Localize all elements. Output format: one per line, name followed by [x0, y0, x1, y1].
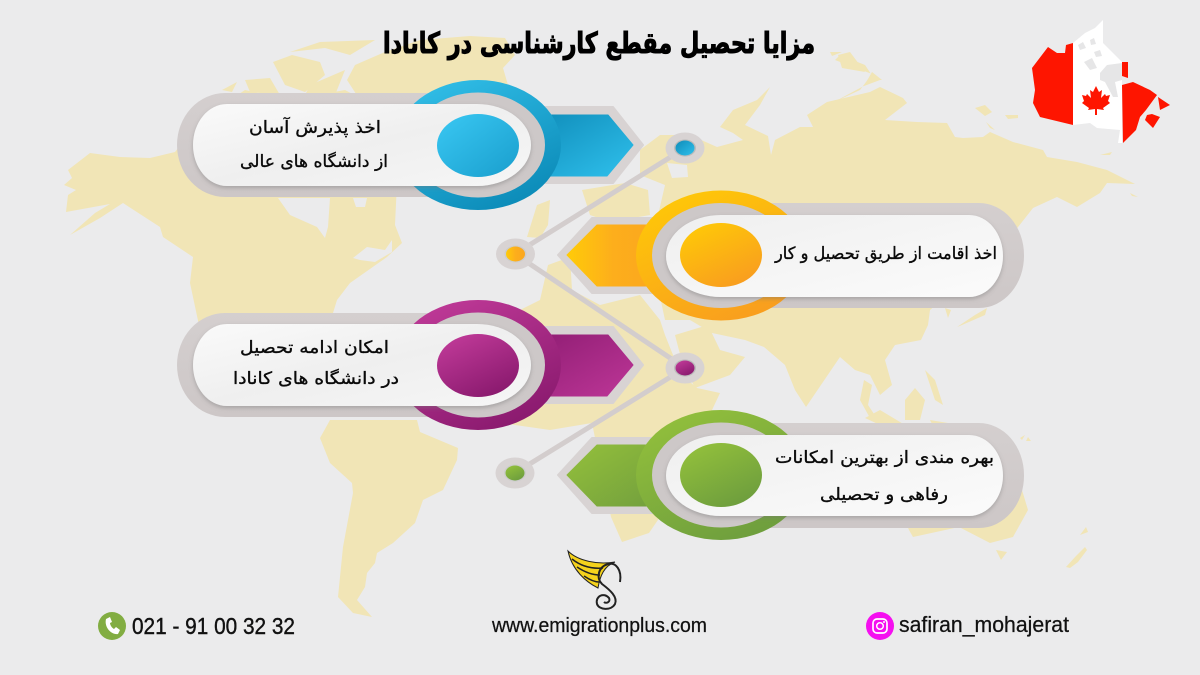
node: green: [496, 458, 534, 488]
icon: maple leaf: [1082, 86, 1110, 115]
node: purple: [666, 352, 704, 384]
connector lines: [515, 148, 685, 473]
contact: phone number: 021 - 91 00 32 32: [132, 613, 295, 639]
text: blue line 1: اخذ پذیرش آسان: [249, 116, 381, 138]
icon: instagram: [866, 612, 894, 640]
panel: green benefit card: [558, 410, 1024, 540]
text: blue line 2: از دانشگاه های عالی: [240, 151, 388, 172]
contact: website: www.emigrationplus.com: [491, 615, 707, 637]
icon disc: purple: [437, 334, 519, 397]
panel: yellow benefit card: [558, 190, 1024, 320]
icon: Canada flag map: [1032, 20, 1170, 143]
text: purple line 2: در دانشگاه های کانادا: [233, 368, 399, 389]
text: purple line 1: امکان ادامه تحصیل: [240, 338, 389, 358]
icon disc: yellow: [680, 223, 762, 287]
node: yellow: [496, 238, 535, 270]
icon disc: blue: [437, 114, 519, 177]
panel: purple benefit card: [177, 300, 643, 430]
world map: [64, 36, 1138, 617]
title: مزایا تحصیل مقطع کارشناسی در کانادا: [383, 26, 815, 60]
panel: blue benefit card: [177, 80, 643, 210]
icon disc: green: [680, 443, 762, 507]
node: blue: [666, 132, 704, 164]
text: green line 1: بهره مندی از بهترین امکانات: [775, 448, 994, 468]
text: yellow line: اخذ اقامت از طریق تحصیل و کار: [774, 244, 997, 264]
contact: instagram handle: safiran_mohajerat: [899, 612, 1069, 637]
icon: phone: [98, 612, 126, 640]
text: green line 2: رفاهی و تحصیلی: [820, 485, 948, 505]
logo: [568, 551, 620, 609]
